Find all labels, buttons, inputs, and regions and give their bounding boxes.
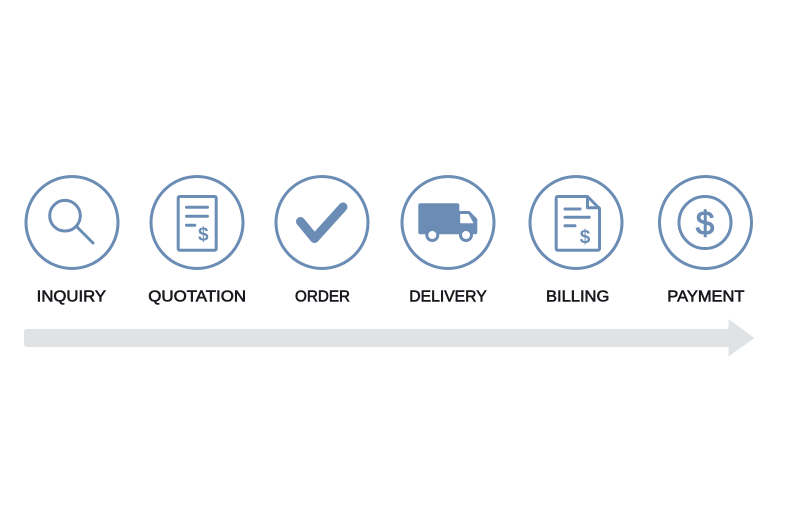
icon: delivery truck in circle (402, 176, 494, 268)
step: order (276, 176, 368, 306)
label: billing: BILLING (546, 288, 609, 306)
step: payment (660, 176, 752, 306)
label: payment: PAYMENT (667, 288, 745, 306)
label: quotation: QUOTATION (148, 288, 246, 306)
label: inquiry: INQUIRY (37, 288, 106, 306)
step: billing (530, 176, 622, 306)
icon: dollar coin in circle: $ (696, 204, 714, 242)
icon: magnifying glass in circle (26, 176, 118, 268)
icon: invoice with folded corner in circle: $ (580, 227, 591, 248)
icon: quotation document in circle: $ (198, 224, 209, 246)
step: delivery (402, 176, 494, 306)
step: quotation (148, 176, 246, 306)
step: inquiry (26, 176, 118, 306)
label: order: ORDER (295, 288, 350, 306)
icon: check mark in circle (276, 176, 368, 268)
label: delivery: DELIVERY (409, 288, 487, 306)
arrow: process direction (24, 319, 754, 356)
